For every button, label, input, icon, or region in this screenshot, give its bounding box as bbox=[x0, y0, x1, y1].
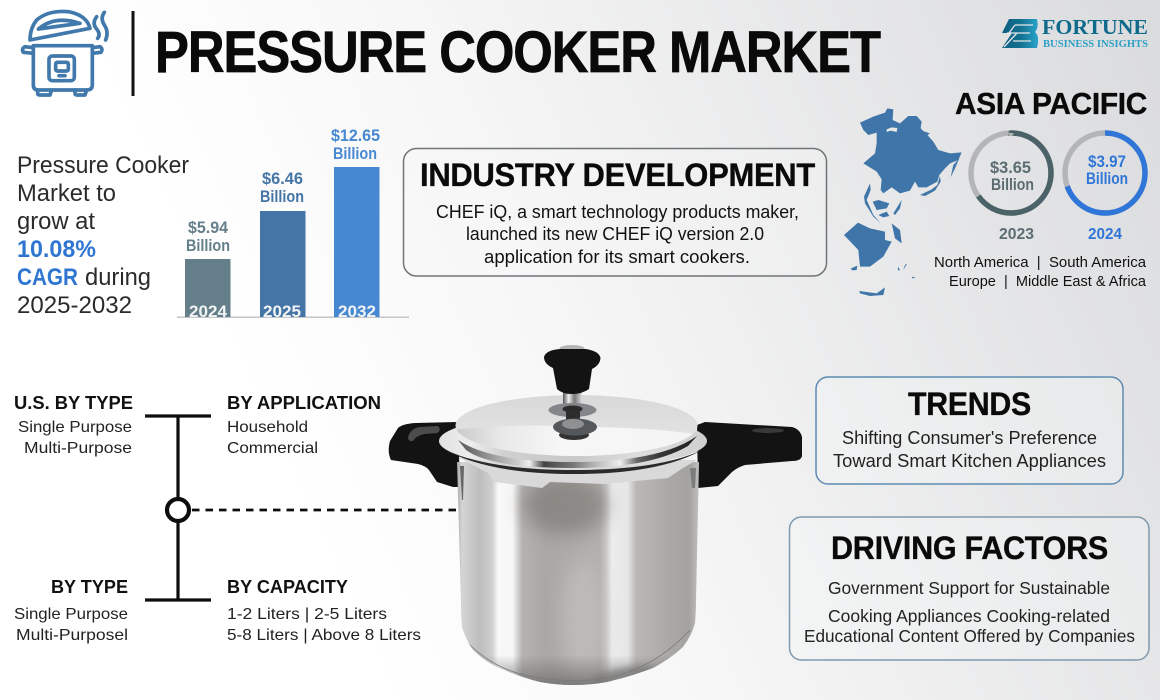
donut chart: 2024: $3.97 bbox=[1088, 153, 1126, 171]
segment: by application: BY APPLICATION bbox=[227, 392, 381, 413]
panel: trends bbox=[816, 377, 1123, 484]
map: Asia Pacific bbox=[844, 108, 962, 296]
heading: Asia Pacific: ASIA PACIFIC bbox=[955, 87, 1147, 121]
segment: by type: Single Purpose bbox=[14, 606, 128, 623]
segment: by type: Multi-Purposel bbox=[16, 627, 128, 644]
panel: industry development: application for its smart cookers. bbox=[484, 247, 750, 267]
panel: driving factors bbox=[790, 517, 1149, 660]
panel: driving factors: Cooking Appliances Cooking-related bbox=[828, 606, 1110, 626]
segmentation connector bbox=[145, 416, 457, 600]
segment: U.S. by type: Single Purpose bbox=[18, 419, 132, 436]
panel: industry development bbox=[404, 148, 826, 276]
donut chart: 2024: 2024 bbox=[1088, 226, 1122, 243]
title divider bbox=[132, 11, 134, 96]
segment: by capacity: 1-2 Liters | 2-5 Liters bbox=[227, 606, 387, 623]
bar chart: 2032 bbox=[338, 302, 376, 321]
segment: by application: Household bbox=[227, 419, 308, 436]
panel: industry development: CHEF iQ, a smart technology products maker, bbox=[436, 202, 799, 222]
segment: U.S. by type bbox=[14, 392, 133, 457]
segment: by capacity bbox=[227, 576, 421, 644]
donut chart: 2023 bbox=[971, 133, 1051, 243]
bar chart: Billion bbox=[333, 144, 377, 163]
bar chart: $5.94 bbox=[188, 218, 229, 237]
panel: industry development: launched its new CHEF iQ version 2.0 bbox=[466, 224, 764, 244]
pressure cooker illustration bbox=[389, 345, 802, 690]
text block: CAGR statement: 2025-2032 bbox=[17, 292, 132, 319]
panel: trends: Toward Smart Kitchen Appliances bbox=[833, 451, 1106, 471]
segment: by application bbox=[227, 392, 381, 457]
text block: other regions: North America | South America bbox=[934, 254, 1147, 271]
panel: industry development: INDUSTRY DEVELOPMENT bbox=[420, 157, 815, 193]
segment: by capacity: BY CAPACITY bbox=[227, 576, 349, 597]
bar chart: 2024 bbox=[189, 302, 228, 321]
text block: other regions bbox=[934, 254, 1147, 290]
text block: CAGR statement: grow at bbox=[17, 208, 95, 235]
segment: by type bbox=[14, 576, 128, 644]
donut chart: 2023: Billion bbox=[991, 175, 1034, 194]
segment: by capacity: 5-8 Liters | Above 8 Liters bbox=[227, 627, 421, 644]
text block: other regions: Europe | Middle East & Africa bbox=[949, 273, 1147, 290]
text block: CAGR statement: Pressure Cooker bbox=[17, 152, 189, 179]
bar chart: Billion bbox=[260, 187, 304, 206]
panel: driving factors: Government Support for Sustainable bbox=[828, 578, 1110, 598]
panel: driving factors: DRIVING FACTORS bbox=[831, 530, 1108, 566]
panel: trends: Shifting Consumer's Preference bbox=[842, 428, 1097, 448]
bar chart bbox=[177, 126, 409, 321]
segment: by type: BY TYPE bbox=[51, 576, 128, 597]
segment: by application: Commercial bbox=[227, 440, 318, 457]
bar chart: $6.46 bbox=[262, 169, 303, 188]
segment: U.S. by type: U.S. BY TYPE bbox=[14, 392, 133, 413]
panel: trends: TRENDS bbox=[908, 386, 1031, 422]
donut chart: 2024 bbox=[1065, 133, 1145, 243]
title: PRESSURE COOKER MARKET bbox=[155, 20, 881, 85]
panel: driving factors: Educational Content Offered by Companies bbox=[804, 626, 1135, 646]
bar chart: $12.65 bbox=[331, 126, 380, 145]
text block: CAGR statement: 10.08% bbox=[17, 236, 96, 263]
donut chart: 2024: Billion bbox=[1086, 170, 1128, 188]
logo: Fortune Business Insights: BUSINESS INSIGHTS bbox=[1043, 38, 1148, 50]
icon: rice cooker bbox=[22, 11, 107, 95]
donut chart: 2023: $3.65 bbox=[990, 158, 1031, 177]
text block: CAGR statement: Market to bbox=[17, 180, 116, 207]
segment: U.S. by type: Multi-Purpose bbox=[24, 440, 132, 457]
logo: Fortune Business Insights: FORTUNE bbox=[1042, 15, 1148, 39]
donut chart: 2023: 2023 bbox=[999, 226, 1034, 243]
bar chart: 2025 bbox=[263, 302, 301, 321]
text block: CAGR statement: during bbox=[85, 264, 151, 291]
text block: CAGR statement bbox=[17, 152, 189, 319]
text block: CAGR statement: CAGR bbox=[17, 264, 78, 291]
logo: Fortune Business Insights bbox=[1002, 15, 1148, 50]
bar chart: Billion bbox=[186, 236, 230, 255]
